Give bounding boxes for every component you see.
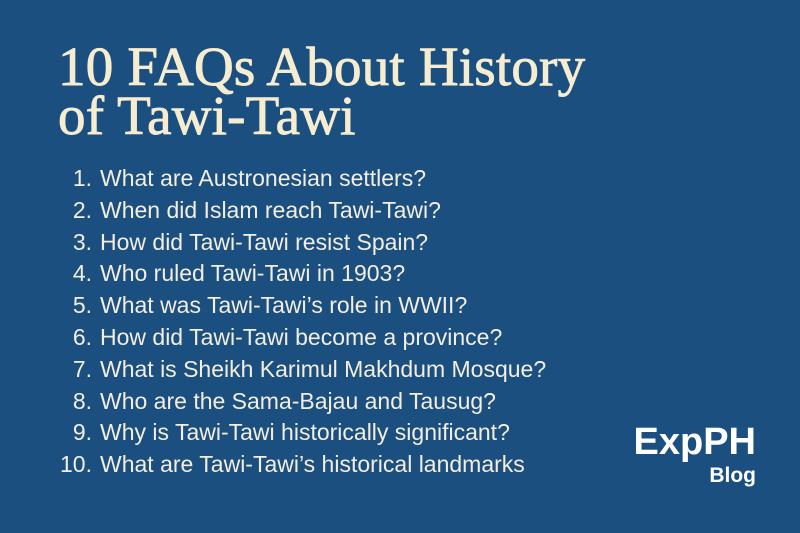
FAQ list: 8. bbox=[73, 388, 92, 414]
FAQ list: 6. bbox=[73, 324, 92, 350]
logo: ExpPH bbox=[634, 421, 756, 463]
FAQ list: 9. bbox=[73, 419, 92, 445]
FAQ list: 5. bbox=[73, 292, 92, 318]
FAQ list: How did Tawi-Tawi become a province? bbox=[100, 324, 502, 350]
logo bbox=[634, 421, 756, 487]
FAQ list: What is Sheikh Karimul Makhdum Mosque? bbox=[100, 356, 546, 382]
FAQ list: 10. bbox=[60, 451, 92, 477]
FAQ list: Who are the Sama-Bajau and Tausug? bbox=[100, 388, 496, 414]
FAQ list bbox=[60, 165, 546, 477]
title: of Tawi-Tawi bbox=[58, 85, 356, 146]
FAQ list: How did Tawi-Tawi resist Spain? bbox=[100, 229, 428, 255]
FAQ list: 2. bbox=[73, 197, 92, 223]
FAQ list: 3. bbox=[73, 229, 92, 255]
FAQ list: 7. bbox=[73, 356, 92, 382]
FAQ list: Why is Tawi-Tawi historically significant? bbox=[100, 419, 510, 445]
FAQ list: What was Tawi-Tawi’s role in WWII? bbox=[100, 292, 467, 318]
FAQ list: 4. bbox=[73, 260, 92, 286]
title bbox=[58, 36, 586, 146]
logo: Blog bbox=[709, 464, 756, 487]
FAQ list: What are Austronesian settlers? bbox=[100, 165, 426, 191]
FAQ list: What are Tawi-Tawi’s historical landmarks bbox=[100, 451, 525, 477]
FAQ list: When did Islam reach Tawi-Tawi? bbox=[100, 197, 441, 223]
FAQ list: Who ruled Tawi-Tawi in 1903? bbox=[100, 260, 405, 286]
FAQ list: 1. bbox=[73, 165, 92, 191]
title: 10 FAQs About History bbox=[58, 36, 585, 97]
